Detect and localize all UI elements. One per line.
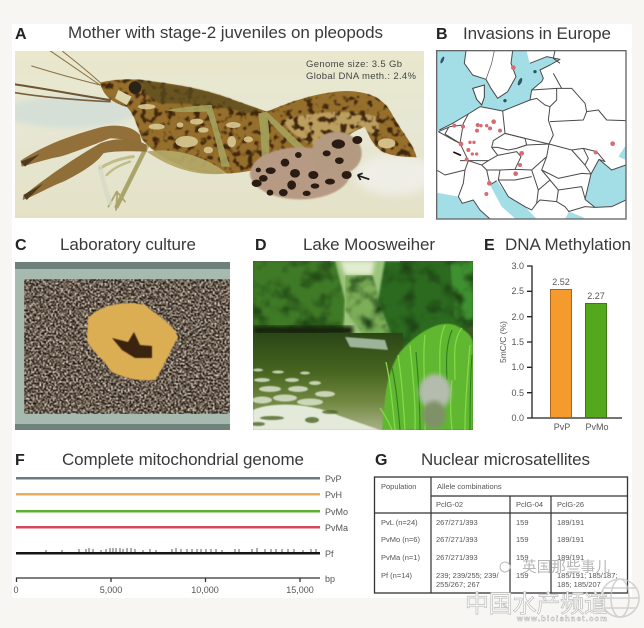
axis and tick labels: 0.5 (511, 388, 524, 398)
dark wave gaps (251, 410, 338, 426)
heading G: Nuclear microsatellites (421, 450, 590, 469)
allele table: 185/191; 185/187; (557, 571, 617, 580)
allele table: 159 (516, 553, 529, 562)
bar: PvMo 2.27: 2.27 (587, 291, 605, 301)
allele table: PvMa (n=1) (381, 553, 420, 562)
wechat account mark: 英国那些事儿 (522, 558, 610, 576)
heading E: E (484, 237, 495, 254)
allele table: 255/267; 267 (436, 580, 480, 589)
genome tracks: PvH (325, 490, 342, 500)
map of Europe (437, 51, 626, 219)
allele table: Allele combinations (437, 482, 502, 491)
axis and tick labels: 5mC/C (%) (498, 321, 508, 363)
eye (129, 81, 141, 94)
heading B: Invasions in Europe (463, 24, 611, 43)
invasion sites (452, 65, 615, 196)
heading F: F (15, 452, 25, 469)
dark carapace ridge (137, 81, 260, 113)
allele table: 267/271/393 (436, 518, 478, 527)
genome tracks: Pf (325, 549, 334, 559)
watermark URL: www.bioishnet.com (516, 614, 607, 623)
genome tracks: PvMa (325, 523, 348, 533)
photo: Lake Moosweiher (251, 261, 473, 430)
allele table: 267/271/393 (436, 535, 478, 544)
allele table: PclG-04 (516, 500, 543, 509)
allele table: 185; 185/207 (557, 580, 601, 589)
axis and tick labels (498, 261, 622, 423)
allele table: 159 (516, 571, 529, 580)
photo: crayfish with juveniles (5, 51, 435, 218)
axis and tick labels: 1.5 (511, 337, 524, 347)
carapace and tail body (100, 79, 417, 174)
allele table: 189/191 (557, 535, 584, 544)
water ripples (252, 368, 380, 430)
arrow to juveniles (358, 173, 369, 180)
photo: gravel tank with sponge (15, 262, 230, 430)
scale axis in bp: 10,000 (191, 585, 219, 595)
axis and tick labels: 0.0 (511, 413, 524, 423)
allele table: Population (381, 482, 416, 491)
panel G: nuclear microsatellites (374, 450, 628, 593)
islands (440, 56, 537, 102)
allele table (374, 477, 628, 593)
channel logo text: 中国水产频道 (465, 591, 608, 618)
axis and tick labels: 3.0 (511, 261, 524, 271)
reed grasses (382, 324, 473, 430)
allele table: PclG-02 (436, 500, 463, 509)
juvenile cluster (250, 132, 362, 199)
axis and tick labels: 2.0 (511, 312, 524, 322)
allele table: 159 (516, 535, 529, 544)
heading F: Complete mitochondrial genome (62, 450, 304, 469)
panel A: crayfish mother (5, 23, 435, 218)
panel E: DNA methylation bar chart (484, 235, 631, 432)
panel C: laboratory culture (15, 235, 230, 430)
rostrum pale patch (115, 90, 132, 105)
allele table: 159 (516, 518, 529, 527)
panel D: lake photo (251, 235, 473, 430)
Denmark (473, 85, 484, 105)
pale tail flesh (283, 112, 379, 147)
heading D: Lake Moosweiher (303, 235, 435, 254)
seas (437, 51, 626, 219)
genome tracks: PvP (325, 474, 342, 484)
scale axis in bp: 15,000 (286, 585, 314, 595)
allele table: 239; 239/255; 239/ (436, 571, 499, 580)
heading C: Laboratory culture (60, 235, 196, 254)
genome tracks (16, 474, 348, 559)
watermark (465, 558, 639, 623)
antennae (15, 51, 110, 102)
genome tracks: PvMo (325, 507, 348, 517)
panel F: mitochondrial genome (13, 450, 348, 595)
bar: PvMo 2.27: PvMo (585, 422, 609, 432)
bar: PvMo 2.27 (585, 291, 609, 432)
heading B: B (436, 26, 448, 43)
watermark globe (601, 579, 639, 617)
genome size note: Genome size: 3.5 Gb (306, 59, 402, 70)
heading G: G (375, 452, 387, 469)
axis and tick labels: 2.5 (511, 286, 524, 296)
heading D: D (255, 237, 267, 254)
allele table: 189/191 (557, 553, 584, 562)
borders (437, 51, 626, 219)
genome size note: Global DNA meth.: 2.4% (306, 71, 417, 82)
allele table: PvMo (n=6) (381, 535, 420, 544)
scale axis in bp (13, 574, 335, 595)
heading A: Mother with stage-2 juveniles on pleopods (68, 23, 383, 42)
axis and tick labels: 1.0 (511, 362, 524, 372)
allele table: Pf (n=14) (381, 571, 413, 580)
bar: PvP 2.52 (550, 277, 572, 432)
allele table: PclG-26 (557, 500, 584, 509)
scale axis in bp: bp (325, 574, 335, 584)
claws (21, 126, 147, 200)
genome size note (306, 59, 417, 82)
heading A: A (15, 26, 27, 43)
scale axis in bp: 0 (13, 585, 19, 595)
panel B: invasions map (436, 24, 626, 219)
allele table: PvL (n=24) (381, 518, 418, 527)
walking legs (100, 143, 148, 210)
pale carapace mottling (138, 104, 395, 153)
heading C: C (15, 237, 27, 254)
allele table: 267/271/393 (436, 553, 478, 562)
scale axis in bp: 5,000 (100, 585, 122, 595)
mottled carapace speckle (100, 79, 417, 174)
bar: PvP 2.52: PvP (554, 422, 570, 432)
allele table: 189/191 (557, 518, 584, 527)
heading E: DNA Methylation (505, 235, 631, 254)
bar: PvP 2.52: 2.52 (552, 277, 570, 287)
